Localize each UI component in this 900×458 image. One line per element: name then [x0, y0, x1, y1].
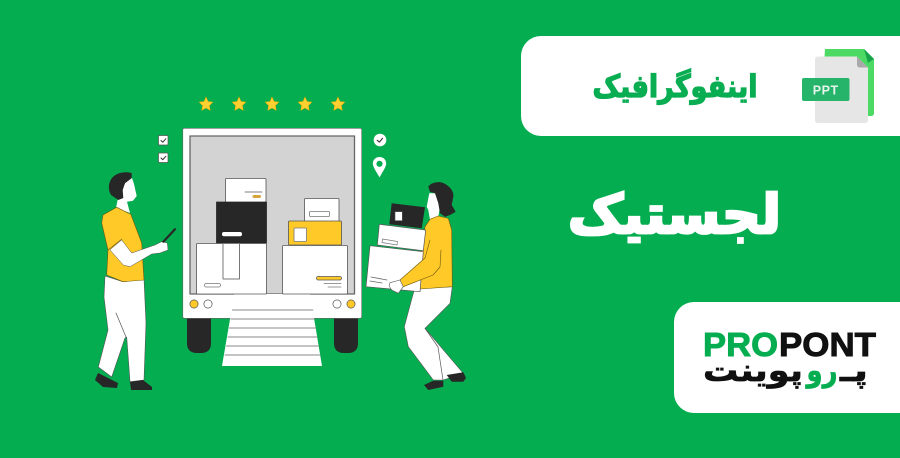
boxes left stack: [196, 178, 266, 294]
heading: infographic: اینفوگرافیک: [592, 68, 758, 105]
yellow sweater: [420, 216, 452, 289]
truck body: [183, 128, 362, 318]
icon: location pin: [373, 157, 386, 178]
trousers: [404, 287, 463, 380]
logo: PROPONT wordmark: PONT: [779, 326, 876, 363]
logo: Persian wordmark: پوینت: [703, 353, 803, 389]
man figure: [95, 172, 175, 390]
shoes: [95, 373, 118, 388]
boxes right stack: [282, 198, 348, 294]
logo: PROPONT wordmark: PRO: [703, 326, 778, 363]
phone: [163, 229, 175, 242]
logo: Persian wordmark: رو: [805, 353, 838, 389]
icon: checkboxes: [158, 136, 168, 162]
carried boxes: [366, 203, 426, 292]
logo: Persian wordmark: [703, 353, 868, 389]
logo: PROPONT wordmark: [703, 326, 876, 363]
panel: logo card: [674, 302, 900, 413]
panel: infographic header card: [521, 36, 900, 136]
ramp: [222, 294, 322, 366]
logo: Persian wordmark: پـ: [839, 353, 868, 389]
icon: check circle: [374, 134, 386, 146]
truck wheels: [187, 316, 358, 353]
stars row: [199, 97, 345, 110]
shoes: [424, 381, 443, 390]
hair: [109, 172, 132, 200]
icon: PPT file: PPT: [813, 84, 839, 98]
icon: PPT file: [802, 49, 874, 123]
man arm: [110, 240, 168, 267]
woman arm and hand: [400, 235, 441, 287]
hair: [428, 182, 456, 217]
neck and face: [116, 178, 137, 213]
face: [427, 193, 440, 220]
yellow shirt: [102, 207, 144, 282]
trousers: [98, 276, 146, 382]
illustration: delivery truck with two movers: [95, 97, 466, 390]
woman figure: [366, 182, 466, 390]
title: logistics: لجستیک: [568, 183, 781, 246]
